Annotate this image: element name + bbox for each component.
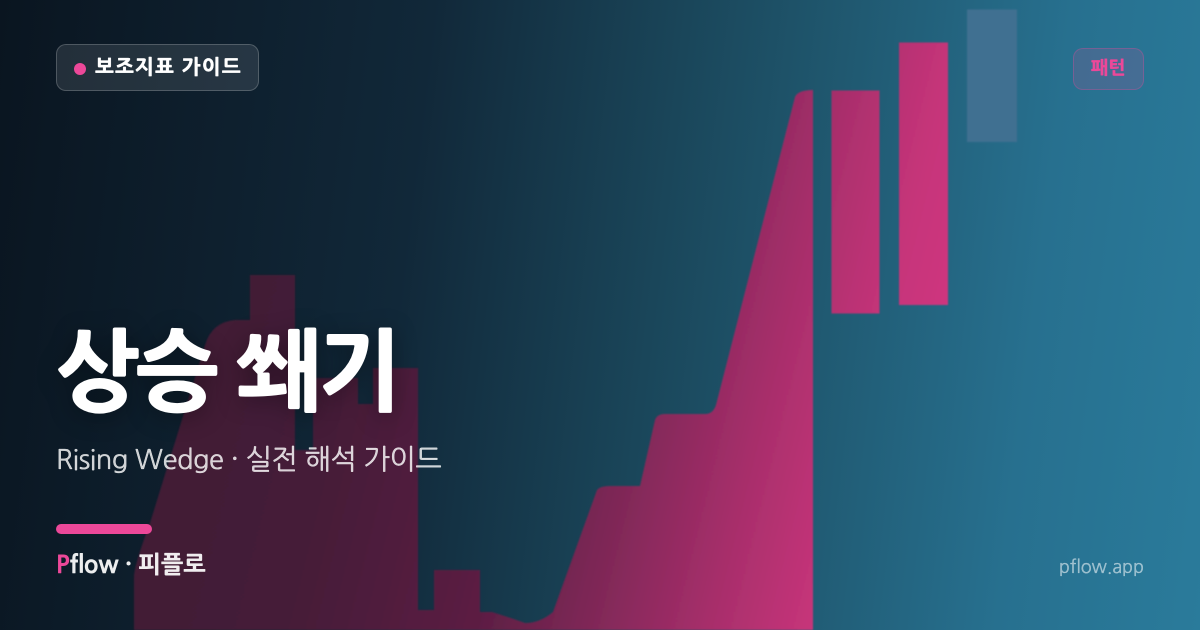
brand: Pflow · 피플로 <box>56 553 206 577</box>
title: 상승 쐐기 <box>56 328 399 416</box>
candle 2 <box>899 42 948 305</box>
candle 1 <box>832 90 880 314</box>
tag text: 패턴 <box>1091 59 1126 77</box>
badge: guide label <box>56 44 259 91</box>
site url: pflow.app <box>1059 558 1144 576</box>
candle 3 <box>967 10 1017 142</box>
subtitle: Rising Wedge · 실전 해석 가이드 <box>56 446 441 474</box>
badge text: 보조지표 가이드 <box>95 57 242 77</box>
wedge area <box>134 90 813 630</box>
accent bar <box>56 524 152 534</box>
tag: pattern <box>1073 48 1144 90</box>
icon: pink dot <box>74 63 86 75</box>
